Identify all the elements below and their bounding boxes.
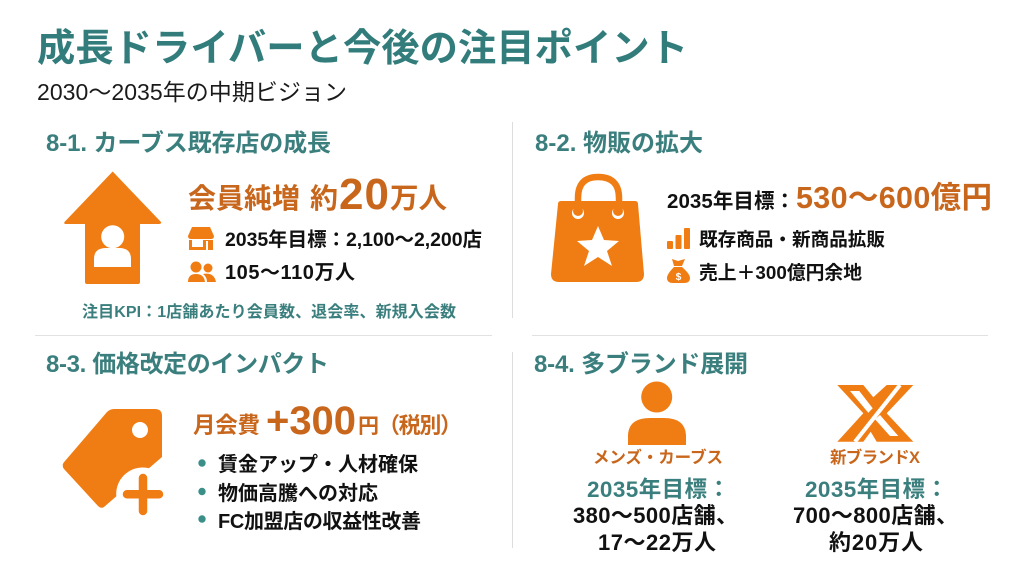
mens target: 17〜22万人 [598, 530, 716, 555]
member net increase headline: 万人 [390, 183, 448, 215]
merchandise item: 既存商品・新商品拡販 [699, 229, 885, 250]
member net increase headline [188, 170, 448, 219]
icon: money bag [667, 259, 690, 283]
icon: person [628, 382, 686, 445]
member net increase headline: 会員純増 [188, 183, 300, 214]
sales target: 2035年目標： [667, 190, 795, 213]
icon: brand X [837, 385, 913, 442]
member net increase headline: 20 [339, 170, 389, 219]
panel: 8-2 merchandise expansion [535, 130, 992, 283]
new brand X label: 新ブランドX [830, 447, 920, 467]
monthly fee headline [193, 399, 462, 443]
new brand target: 700〜800店舗、 [793, 503, 958, 528]
monthly fee headline: +300 [266, 399, 356, 443]
sales target: 530〜600億円 [796, 181, 992, 215]
panel: 8-4 multi-brand [534, 350, 958, 555]
new brand target [793, 477, 958, 555]
mens target [573, 477, 738, 555]
monthly fee headline: 月会費 [193, 413, 260, 438]
icon: house with person [64, 172, 161, 284]
icon: shopping bag with star [551, 177, 644, 282]
panel: 8-1 existing store growth [46, 129, 482, 321]
bullet list [198, 453, 421, 533]
bullet list: 賃金アップ・人材確保 [218, 453, 418, 476]
member net increase headline: 約 [310, 183, 338, 214]
sales target [667, 181, 992, 215]
heading 8-2: 8-2. 物販の拡大 [535, 130, 703, 157]
mens target: 380〜500店舗、 [573, 503, 738, 528]
icon: price tag with plus [63, 409, 169, 520]
mens target: 2035年目標： [587, 477, 730, 502]
heading 8-3: 8-3. 価格改定のインパクト [46, 351, 329, 378]
icon: people [188, 262, 216, 282]
bullet list: FC加盟店の収益性改善 [218, 510, 421, 533]
new brand target: 2035年目標： [805, 477, 948, 502]
sales upside: 売上＋300億円余地 [699, 262, 862, 283]
heading 8-4: 8-4. 多ブランド展開 [534, 350, 748, 378]
store target: 2035年目標：2,100〜2,200店 [225, 228, 482, 251]
bullet list: 物価高騰への対応 [218, 482, 378, 505]
member target: 105〜110万人 [225, 262, 355, 284]
title: 成長ドライバーと今後の注目ポイント [37, 27, 688, 70]
mens curves label: メンズ・カーブス [593, 447, 723, 467]
icon: store [188, 227, 214, 250]
new brand target: 約20万人 [829, 530, 923, 555]
monthly fee headline: 円 [358, 415, 379, 438]
panel: 8-3 price revision [46, 351, 462, 533]
monthly fee headline: （税別） [378, 413, 462, 438]
KPI note: 注目KPI：1店舗あたり会員数、退会率、新規入会数 [82, 302, 456, 321]
heading 8-1: 8-1. カーブス既存店の成長 [46, 129, 331, 157]
icon: bars [667, 228, 690, 249]
icon: money bag: $ [676, 272, 682, 283]
subtitle: 2030〜2035年の中期ビジョン [37, 79, 347, 105]
